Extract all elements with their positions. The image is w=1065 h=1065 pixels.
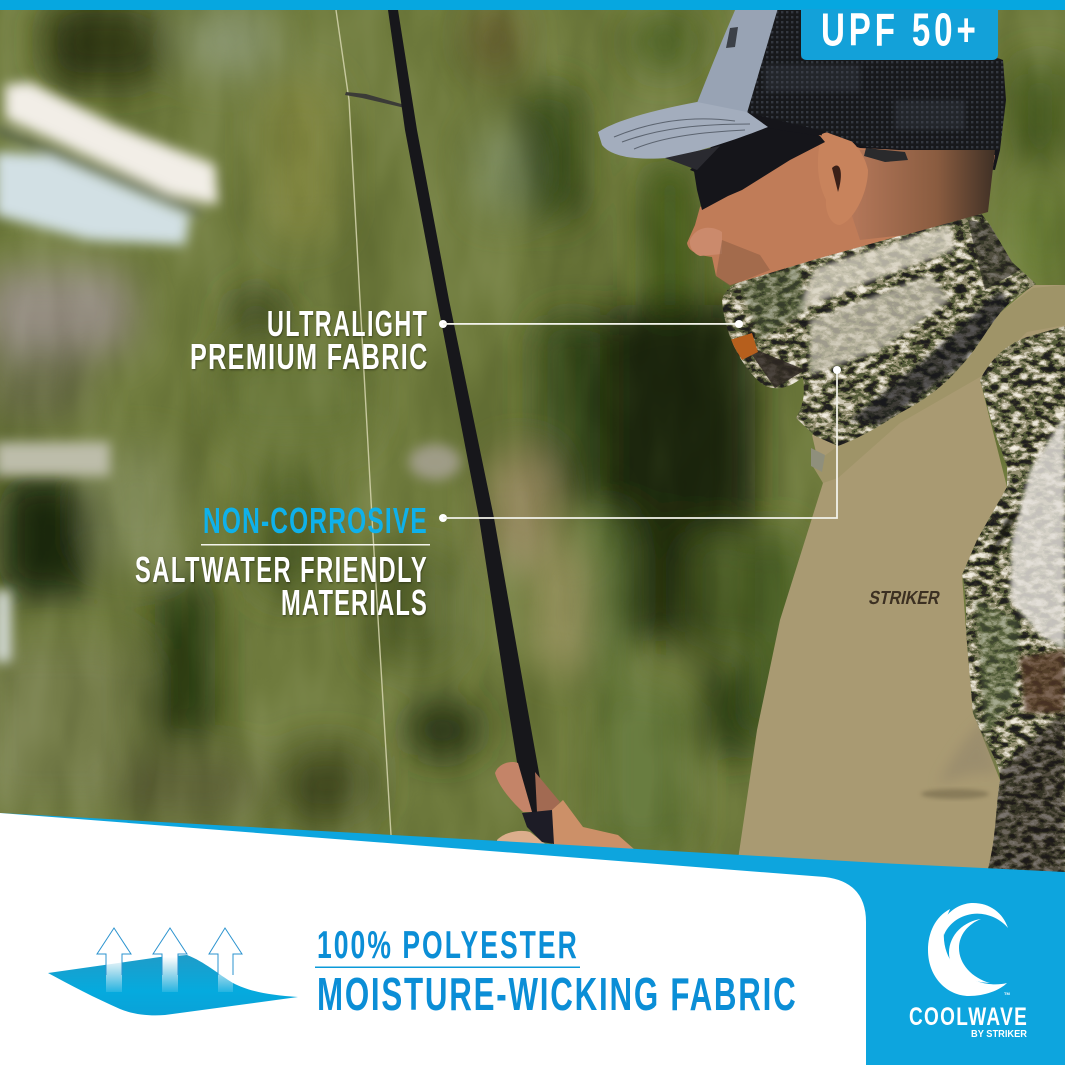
fishing rod [388,10,546,812]
logo: Coolwave by Striker: BY STRIKER [971,1029,1028,1040]
callout: non-corrosive saltwater friendly materials: NON-CORROSIVE [203,500,427,541]
callout: ultralight premium fabric: PREMIUM FABRIC [190,337,427,377]
camo sleeve [962,326,1065,872]
bottom white panel [0,813,866,1065]
callout: ultralight premium fabric [190,305,743,377]
bottom blue band [0,813,1065,1065]
neck gaiter [715,205,1045,450]
callout: non-corrosive saltwater friendly materials [135,366,841,623]
face and neck [687,135,995,285]
rod guide [345,92,405,108]
shirt body [735,285,1065,880]
back of neck [850,150,995,240]
nose highlight [690,228,722,256]
heading: 100% polyester moisture-wicking fabric [315,924,796,1021]
icon: moisture-wicking fabric with arrows [48,928,298,1015]
shirt collar band [812,285,1065,483]
cap brim [598,102,768,159]
callout: non-corrosive saltwater friendly materials: MATERIALS [281,583,427,623]
heading: 100% polyester moisture-wicking fabric: 100% POLYESTER [317,924,577,967]
under brim shadow [665,146,720,170]
shirt logo: STRIKER: STRIKER [867,587,942,608]
heading: 100% polyester moisture-wicking fabric: MOISTURE-WICKING FABRIC [317,969,796,1021]
sunglasses [693,128,825,210]
callout: ultralight premium fabric: ULTRALIGHT [267,305,427,344]
head shadow under cap [690,112,1000,172]
grey blurred patches beside rod [409,444,461,480]
fishing line [336,10,391,835]
cap mesh [745,8,1006,150]
logo: Coolwave by Striker: COOLWAVE [909,1002,1027,1031]
ear [822,132,868,216]
cap front panel [697,8,778,113]
collar flap [811,448,825,472]
logo: Coolwave by Striker [909,903,1028,1040]
blurred white awning [0,82,218,662]
hand on rod [495,762,634,849]
top bar [0,0,1065,10]
stubble jaw shading [716,240,770,286]
logo mark: crescent wave: TM [1004,991,1010,996]
cap logo patch [726,27,738,48]
badge: UPF 50+: UPF 50+ [821,5,976,56]
callout: non-corrosive saltwater friendly materials: SALTWATER FRIENDLY [135,550,427,590]
